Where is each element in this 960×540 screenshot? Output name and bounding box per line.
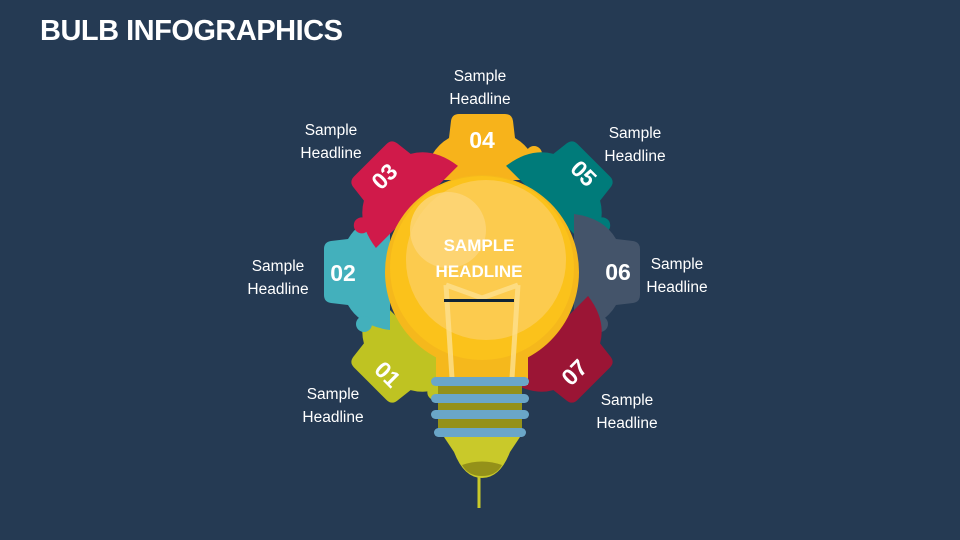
piece 02 [324,214,390,332]
piece numbers: 04 [469,127,495,153]
item labels: Headline [300,145,362,162]
item labels: Sample [651,256,703,273]
piece 03 [328,119,458,249]
piece 06 [574,214,640,332]
item labels: Headline [449,91,511,108]
item labels: Headline [596,415,658,432]
piece 01 [329,296,459,426]
piece numbers: 07 [556,354,593,391]
item labels [247,68,708,432]
piece numbers: 06 [605,259,631,285]
item labels: Sample [601,392,653,409]
item labels: Headline [604,148,666,165]
bulb glass [385,175,579,385]
item labels: Sample [252,258,304,275]
bulb base [431,377,529,508]
title: BULB INFOGRAPHICS [40,15,342,47]
center headline: HEADLINE [436,262,522,281]
piece numbers: 03 [366,158,403,195]
piece numbers [330,127,631,393]
item labels: Sample [305,122,357,139]
center headline [436,236,522,302]
item labels: Headline [247,281,309,298]
item labels: Headline [302,409,364,426]
item labels: Sample [609,125,661,142]
piece numbers: 01 [369,356,406,393]
piece 04 [424,114,542,180]
piece 07 [506,296,635,425]
piece 05 [506,119,636,249]
item labels: Headline [646,279,708,296]
piece numbers: 02 [330,260,356,286]
piece numbers: 05 [565,155,602,192]
center headline: SAMPLE [444,236,514,255]
item labels: Sample [454,68,506,85]
item labels: Sample [307,386,359,403]
